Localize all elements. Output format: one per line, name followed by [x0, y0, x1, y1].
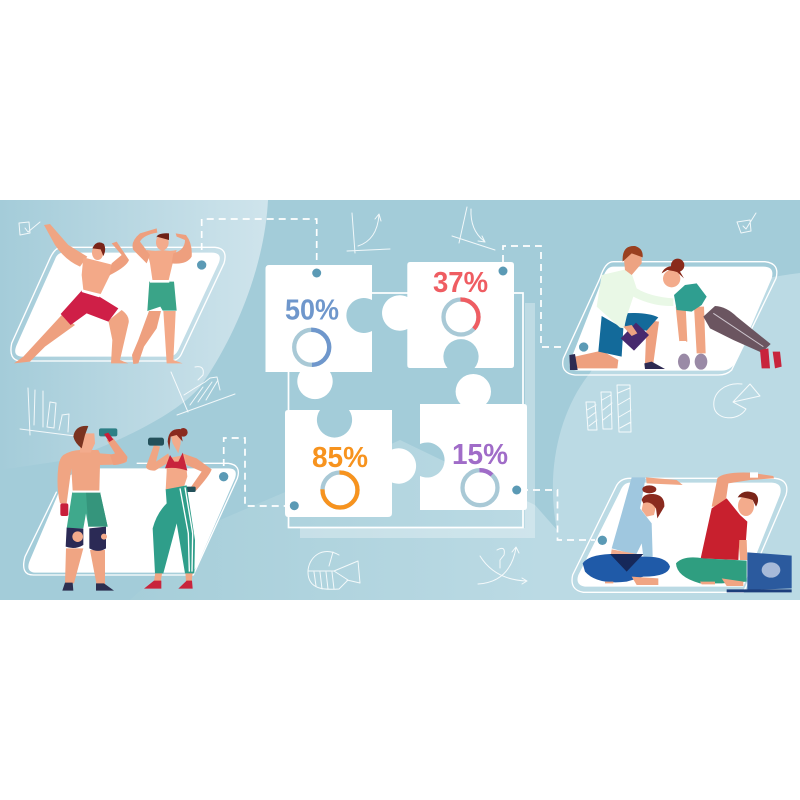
blue dot	[598, 536, 607, 545]
doodle: falling curve chart	[452, 207, 495, 250]
ring 85	[322, 472, 358, 508]
doodle: crossing arrows	[478, 547, 527, 584]
panel: drink break	[24, 426, 238, 591]
puzzle frame shadow	[300, 303, 535, 538]
panel: bodybuilders	[11, 224, 225, 364]
percentage 50: 50%	[285, 294, 339, 326]
figure: woman with dumbbell	[144, 428, 212, 589]
puzzle frame	[288, 293, 523, 528]
dot 50	[312, 268, 321, 278]
puzzle piece 4: 15%	[420, 374, 527, 510]
figure: trainer	[569, 246, 673, 370]
doodle: bar chart left	[20, 388, 75, 436]
dashed connector 4	[521, 490, 595, 540]
doodle: checkbox top left	[19, 222, 40, 235]
background band	[0, 200, 800, 600]
figure: man stretching	[676, 472, 774, 586]
doodle: rising curve chart	[347, 213, 390, 253]
percentage 85: 85%	[312, 442, 368, 474]
puzzle piece 1: 50%	[266, 265, 372, 399]
blue dot	[197, 260, 206, 270]
panel: trainer and plank	[563, 246, 782, 375]
puzzle piece 2: 37%	[382, 262, 514, 368]
figure: lunging man	[14, 224, 129, 363]
ring 15	[462, 470, 498, 505]
doodle: pie chart bottom	[308, 551, 360, 589]
dashed connector 1	[202, 219, 317, 265]
dashed connector 3	[224, 438, 288, 506]
dot 37	[498, 266, 508, 276]
doodle: pie chart right	[714, 384, 760, 418]
doodle: area chart	[171, 367, 235, 415]
percentage 15: 15%	[452, 439, 508, 471]
doodle: hatched bars right	[586, 385, 631, 432]
ring 50	[294, 330, 329, 365]
dot 15	[512, 486, 521, 494]
panel: seated stretching	[572, 472, 792, 592]
ring 37	[444, 300, 478, 334]
percentage 37: 37%	[433, 267, 488, 299]
figure: flexing man	[132, 228, 192, 364]
figure: woman planking	[662, 259, 782, 370]
puzzle piece 3: 85%	[285, 410, 416, 517]
blue dot	[219, 472, 228, 481]
blue dot	[579, 342, 588, 352]
doodle: checkbox top right	[737, 213, 756, 233]
dashed connector 2	[503, 246, 566, 347]
icon: laptop	[727, 552, 792, 592]
figure: man drinking	[57, 426, 127, 591]
figure: woman stretching	[583, 477, 683, 585]
dot 85	[290, 501, 299, 510]
